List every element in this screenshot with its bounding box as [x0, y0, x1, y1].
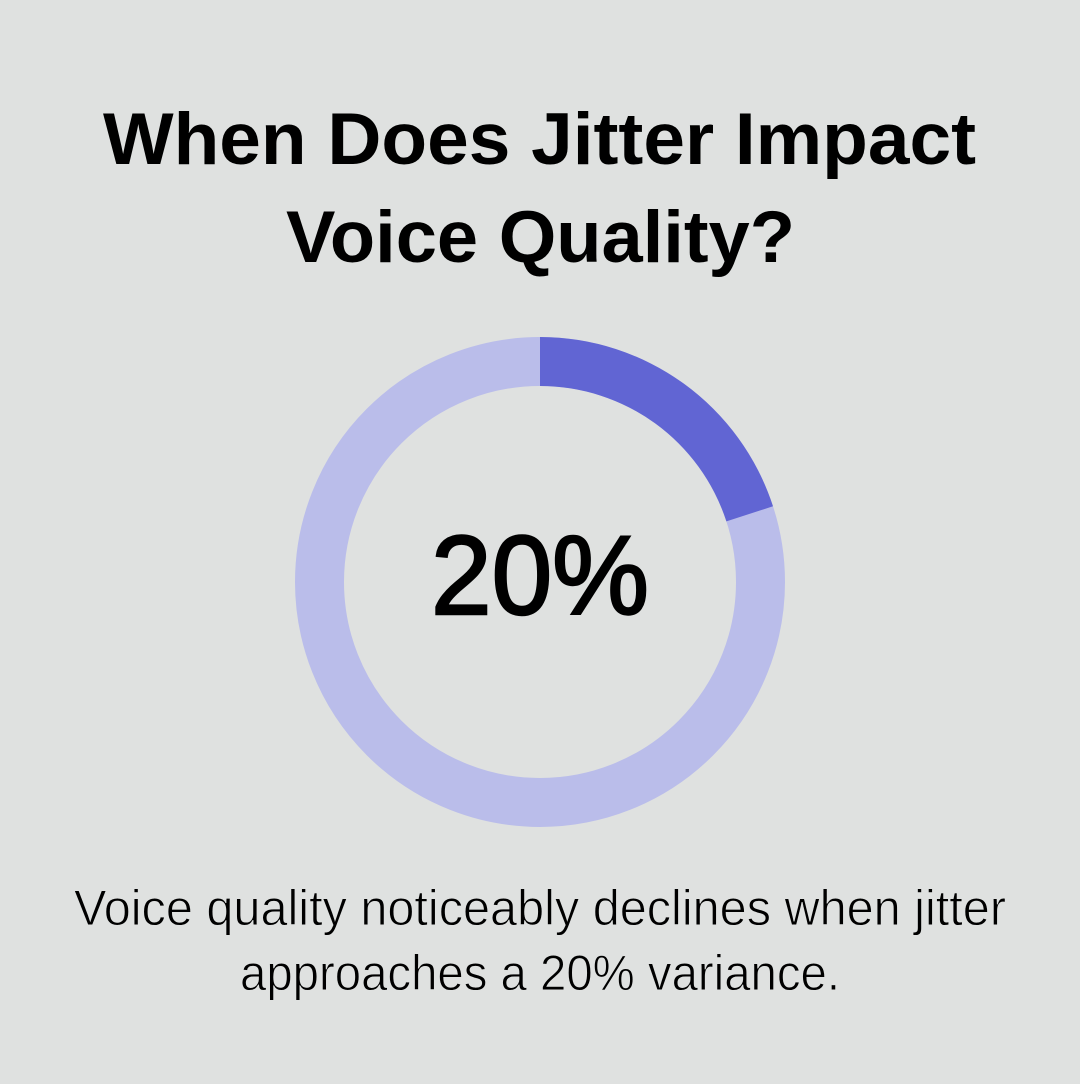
donut track	[320, 362, 760, 802]
caption	[74, 880, 1006, 1001]
donut segment: 20%	[540, 337, 773, 521]
caption: Voice quality noticeably declines when jitter	[74, 880, 1006, 936]
title	[103, 99, 976, 278]
caption: approaches a 20% variance.	[240, 945, 840, 1001]
center value: 20%	[431, 513, 649, 638]
title: When Does Jitter Impact	[103, 99, 976, 180]
title: Voice Quality?	[286, 197, 795, 278]
donut chart: 20%	[320, 337, 773, 802]
